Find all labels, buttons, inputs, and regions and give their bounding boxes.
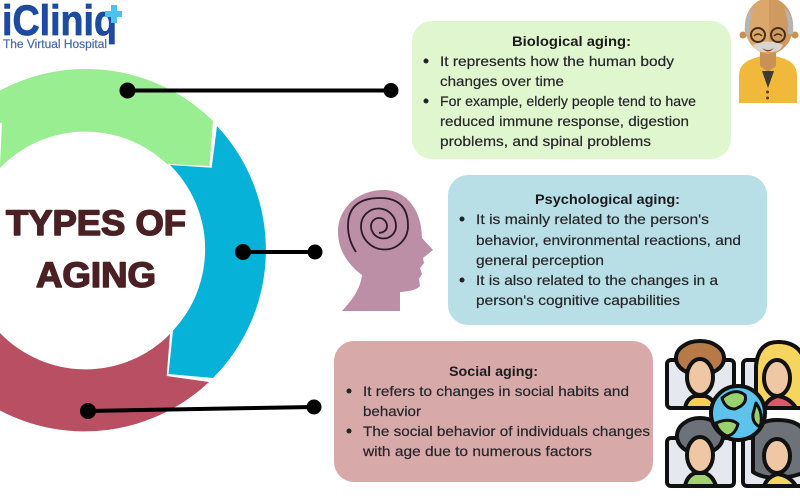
heading: social aging: Social aging: <box>449 363 538 379</box>
panel: psychological aging: behavior, environmental reactions, and <box>476 232 741 248</box>
panel: biological aging: changes over time <box>440 73 564 89</box>
panel: psychological aging <box>448 175 767 325</box>
ring diagram <box>0 69 266 431</box>
connector: biological <box>120 82 398 98</box>
panel: biological aging: For example, elderly people tend to have <box>440 93 696 109</box>
logo: iCliniq: The Virtual Hospital <box>3 39 107 51</box>
panel: psychological aging: person's cognitive capabilities <box>476 292 680 308</box>
panel: biological aging <box>412 21 731 159</box>
ring segment: blue <box>168 126 266 378</box>
title: AGING <box>36 256 156 295</box>
panel: psychological aging: It is mainly related to the person's <box>476 211 709 227</box>
connector: psychological <box>235 244 322 260</box>
title <box>6 204 186 295</box>
icon: people and globe <box>667 341 800 486</box>
connector: social <box>80 400 322 419</box>
panel: psychological aging: It is also related to the changes in a <box>476 272 718 288</box>
heading: biological aging: Biological aging: <box>512 33 631 49</box>
icon: head with spiral <box>338 190 433 311</box>
panel: biological aging: It represents how the human body <box>440 53 674 69</box>
heading: psychological aging: Psychological aging: <box>535 191 680 207</box>
icon: elderly man <box>739 0 798 103</box>
panel: social aging <box>334 341 653 482</box>
panel: social aging: The social behavior of individuals changes <box>363 423 650 439</box>
panel: biological aging: reduced immune response, digestion <box>440 113 689 129</box>
ring segment: green <box>0 69 213 168</box>
icon: logo plus <box>105 5 122 23</box>
ring segment: red <box>0 333 209 431</box>
panel: psychological aging: general perception <box>476 252 604 268</box>
panel: biological aging: problems, and spinal problems <box>440 133 651 149</box>
panel: social aging: behavior <box>363 403 421 419</box>
title: TYPES OF <box>6 204 186 243</box>
panel: social aging: It refers to changes in social habits and <box>363 383 629 399</box>
panel: social aging: with age due to numerous factors <box>362 443 592 459</box>
